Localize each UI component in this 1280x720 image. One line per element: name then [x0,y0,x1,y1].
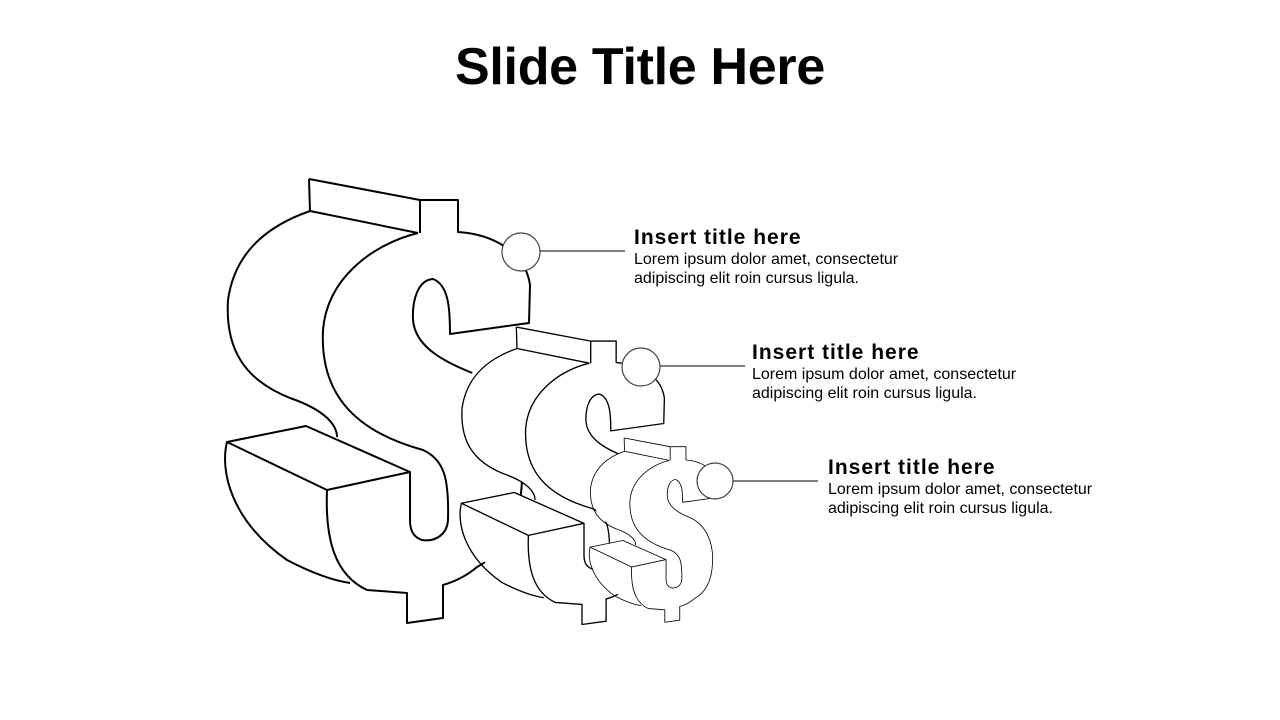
text block 3: Lorem ipsum dolor amet, consectetur [828,481,1092,498]
text block 1: Insert title here [634,226,802,249]
connector 2 [622,348,745,386]
connector 1 [502,233,625,271]
text block 2 [752,341,1016,402]
text block 3: adipiscing elit roin cursus ligula. [828,500,1053,517]
icon: large dollar [223,179,530,623]
text block 1: Lorem ipsum dolor amet, consectetur [634,251,898,268]
text block 1 [634,226,898,287]
icon: small dollar [588,438,716,622]
text block 2: adipiscing elit roin cursus ligula. [752,385,977,402]
title: Slide Title Here [455,38,825,96]
text block 1: adipiscing elit roin cursus ligula. [634,270,859,287]
text block 3 [828,456,1092,517]
text block 2: Insert title here [752,341,920,364]
text block 3: Insert title here [828,456,996,479]
text block 2: Lorem ipsum dolor amet, consectetur [752,366,1016,383]
icon: medium dollar [459,327,664,625]
connector 3 [697,463,818,499]
